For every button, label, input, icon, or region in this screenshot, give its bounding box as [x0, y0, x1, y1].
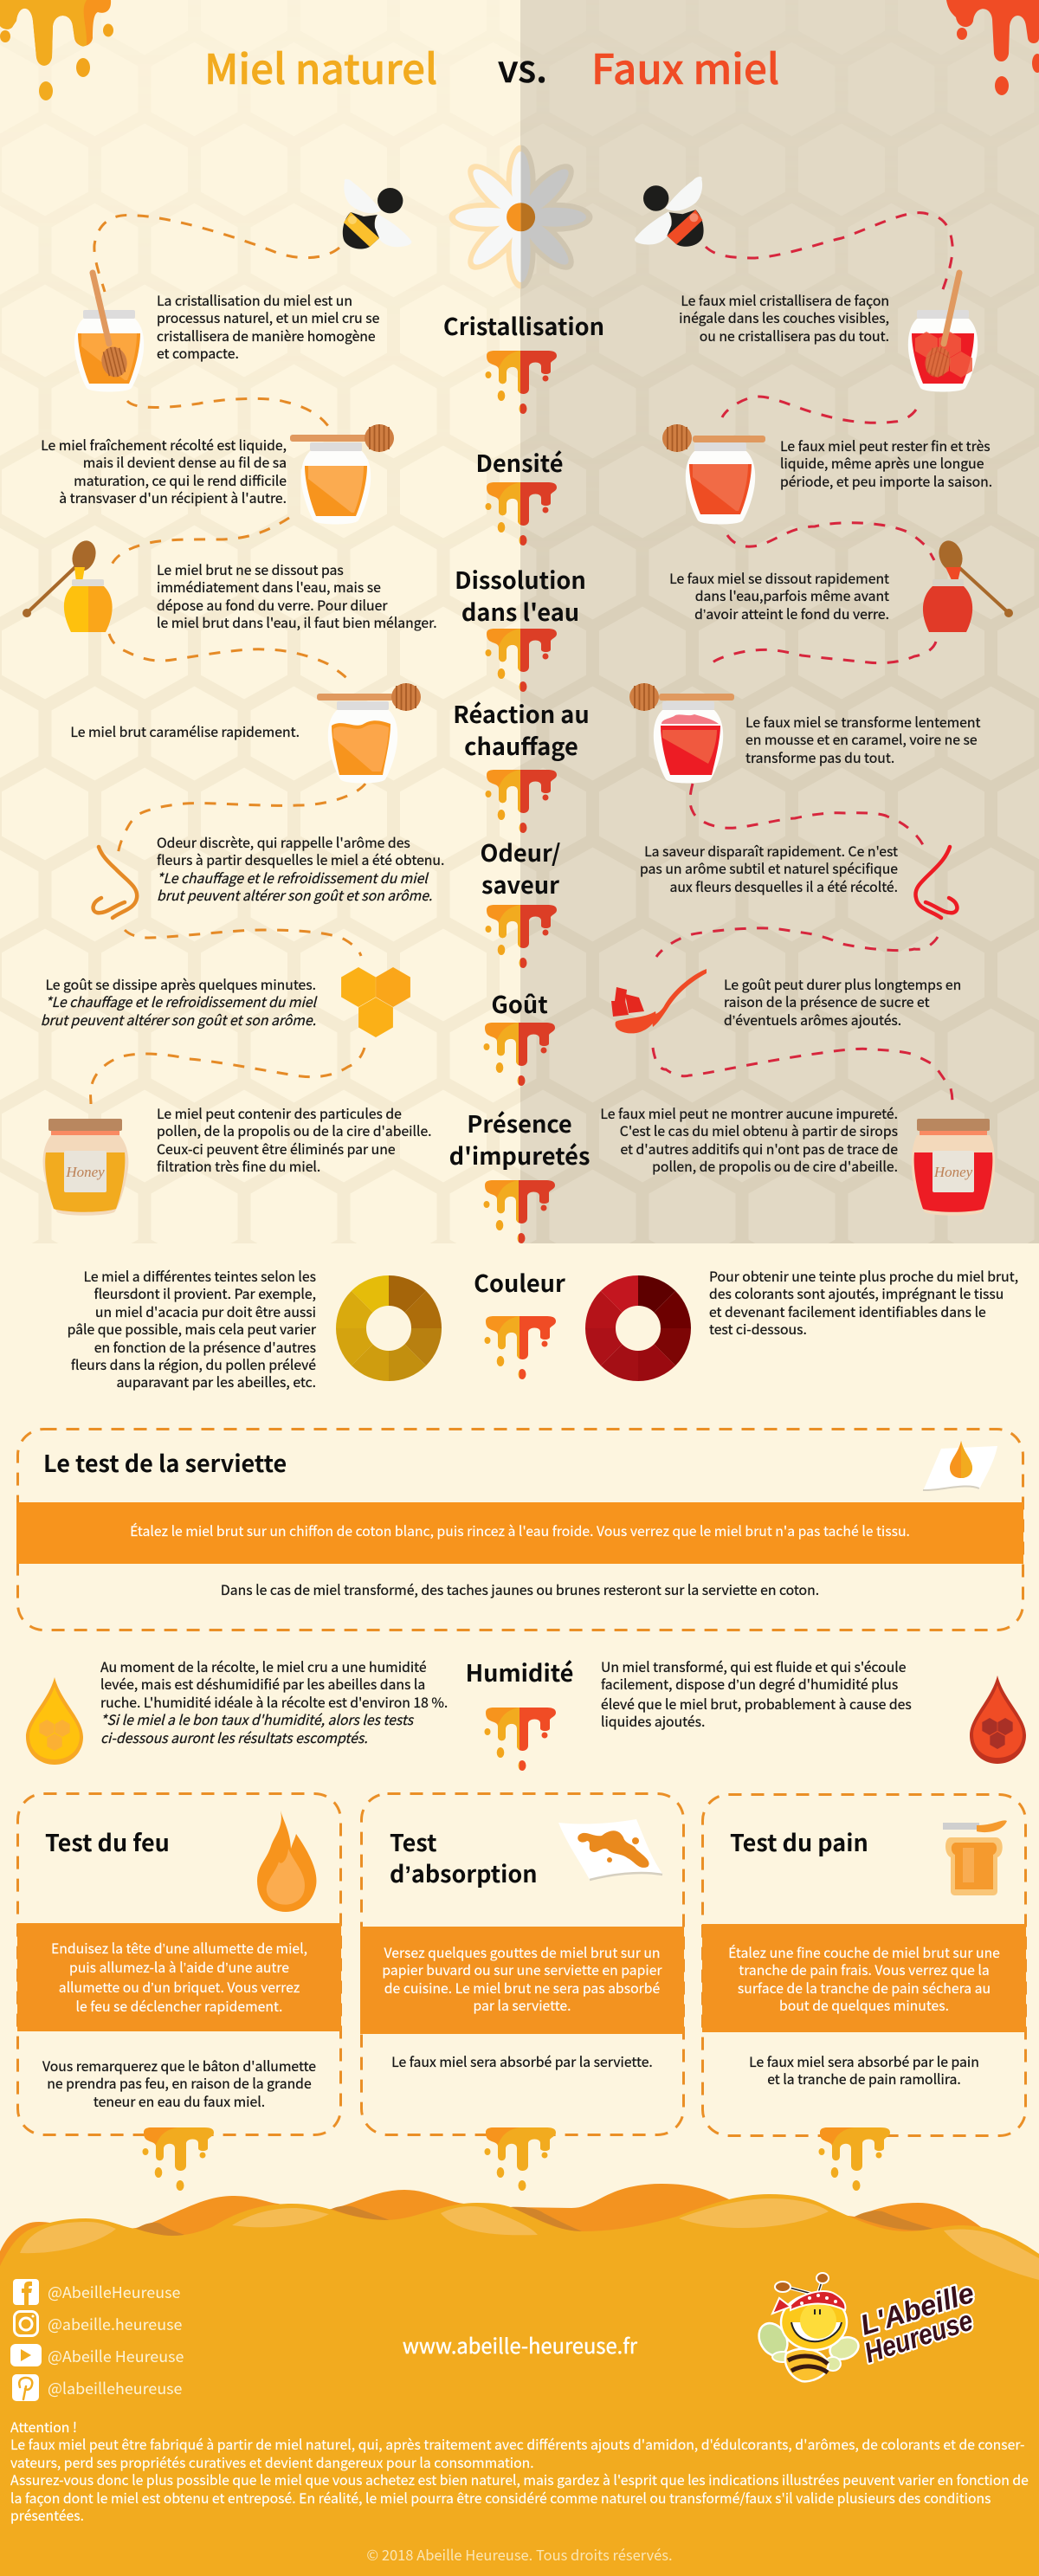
text: smell natural: brut peuvent altérer son goût et son arôme. [157, 885, 432, 905]
text: dissolution false: dans l'eau,parfois même avant [695, 585, 889, 605]
text: absorption test instructions [382, 1942, 662, 2015]
heading: Test d'absorption: Test [390, 1824, 436, 1858]
icon: jar density natural honey [290, 424, 394, 525]
icon: jar heating natural honey [317, 683, 421, 783]
title: vs.: vs. [498, 40, 547, 94]
text: fire test result: teneur en eau du faux miel. [94, 2091, 265, 2111]
text: pinterest handle: @labeilleheureuse [48, 2377, 182, 2399]
icon: drip separators on cream [485, 1316, 556, 1771]
icon: nose false honey [915, 847, 957, 918]
text: impurities false: Le faux miel peut ne montrer aucune impureté. [600, 1103, 898, 1123]
chart: false honey colour ring [585, 1275, 691, 1381]
icon: wave highlights [20, 2198, 1039, 2280]
heading: Test du feu: Test du feu [45, 1824, 170, 1858]
panel: fire test frame [17, 1794, 341, 2135]
background: honeycomb pattern [0, 282, 1039, 1243]
logo: L'Abeille Heureuse: L'Abeille [856, 2276, 978, 2341]
icon: wave front layer [0, 2194, 1039, 2576]
text: colour natural: Le miel a différentes teintes selon les [83, 1266, 316, 1286]
text: dissolution false [669, 568, 889, 623]
text: crystallisation natural: et compacte. [157, 343, 239, 363]
heading: Dissolution dans l'eau: dans l'eau [461, 593, 579, 628]
icon: honey waves back layer [0, 2184, 1039, 2338]
icon: honey jar with label natural: Honey [65, 1164, 105, 1180]
text: humidity natural: Au moment de la récolte, le miel cru a une humidité [100, 1656, 427, 1676]
text: warning note: vateurs, perd ses propriétés curatives et devient dangereux pour la consommation. [10, 2452, 534, 2472]
text: colour natural: en fonction de la présence d'autres [94, 1337, 316, 1357]
text: heating false: Le faux miel se transforme lentement [745, 712, 980, 732]
text: taste natural [41, 974, 318, 1030]
text: crystallisation false [679, 290, 889, 345]
text: humidity false: Un miel transformé, qui est fluide et qui s'écoule [601, 1656, 906, 1676]
text: smell natural: Odeur discrète, qui rappelle l'arôme des [157, 832, 410, 852]
background: false honey side [520, 0, 1039, 1243]
text: absorption test instructions: de cuisine. Le miel brut ne sera pas absorbé [384, 1978, 660, 1998]
text: smell natural: fleurs à partir desquelles le miel a été obtenu. [157, 849, 444, 869]
text: fire test result: Vous remarquerez que le bâton d'allumette [42, 2056, 316, 2076]
text: colour false: Pour obtenir une teinte plus proche du miel brut, [709, 1266, 1018, 1286]
text: fire test instructions: allumette ou d’un briquet. Vous verrez [59, 1977, 300, 1997]
title: Faux miel: Faux miel [591, 36, 779, 96]
icon: facebook [13, 2279, 39, 2305]
text: taste natural: *Le chauffage et le refroidissement du miel [45, 991, 316, 1011]
heading: Odeur/saveur [480, 834, 561, 901]
icon: drips under test cards [142, 2127, 890, 2191]
text: density natural: maturation, ce qui le rend difficile [74, 470, 287, 490]
icon: youtube [10, 2344, 42, 2366]
heading: Cristallisation: Cristallisation [443, 307, 604, 342]
text: humidity false: liquides ajoutés. [601, 1711, 705, 1731]
icon: natural honey drop [26, 1677, 83, 1765]
text: density false: période, et peu importe la saison. [780, 471, 992, 491]
heading: Le test de la serviette: Le test de la serviette [43, 1445, 287, 1479]
text: colour natural [68, 1266, 317, 1391]
text: smell false: pas un arôme subtil et naturel spécifique [640, 858, 898, 878]
heading: Test d'absorption [390, 1824, 538, 1889]
text: taste natural: Le goût se dissipe après quelques minutes. [45, 974, 316, 994]
heading: Dissolution dans l'eau [455, 561, 586, 628]
arrows: false honey dashed path [653, 213, 952, 1104]
text: taste false: Le goût peut durer plus longtemps en [724, 974, 961, 994]
text: absorption test instructions: papier buvard ou sur une serviette en papier [382, 1959, 662, 1979]
text: impurities false: et d'autres additifs qui n'ont pas de trace de [620, 1139, 898, 1159]
text: impurities false: C'est le cas du miel obtenu à partir de sirops [620, 1120, 898, 1140]
text: taste false: d’éventuels arômes ajoutés. [724, 1010, 901, 1030]
text: density natural: à transvaser d'un récipient à l'autre. [59, 487, 287, 507]
text: impurities natural: Ceux-ci peuvent être éliminés par une [157, 1139, 396, 1159]
panel: bread test frame [702, 1794, 1026, 2135]
text: bread test instructions: bout de quelques minutes. [779, 1995, 949, 2015]
text: crystallisation natural: processus naturel, et un miel cru se [157, 307, 379, 327]
text: dissolution natural: le miel brut dans l'eau, il faut bien mélanger. [157, 612, 437, 632]
icon: honey jar with label false [912, 1119, 995, 1216]
icon: pinterest [12, 2374, 39, 2401]
icon: honey jar with label natural [43, 1119, 128, 1216]
text: towel test result: Dans le cas de miel transformé, des taches jaunes ou brunes resteront sur la serviette en coton. [221, 1579, 819, 1599]
logo: L'Abeille Heureuse: Heureuse [861, 2304, 977, 2369]
heading: Goût: Goût [491, 985, 548, 1020]
text: humidity natural [100, 1656, 448, 1747]
text: smell false [640, 841, 898, 896]
text: density natural: mais il devient dense au fil de sa [83, 452, 287, 472]
text: warning note: Assurez-vous donc le plus possible que le miel que vous achetez est bien naturel, mais gardez à l'esprit que les indications illustrées peuvent varier en fonction de [10, 2469, 1029, 2489]
text: smell false: aux fleurs desquelles il a été récolté. [670, 876, 898, 896]
text: crystallisation natural: cristallisera de manière homogène [157, 326, 376, 345]
text: warning note: présentées. [10, 2505, 84, 2525]
icon: spoon and jar natural honey [23, 538, 113, 632]
heading: Odeur/saveur: Odeur/ [480, 834, 561, 868]
text: colour false [709, 1266, 1018, 1339]
icon: honeycomb [341, 967, 410, 1037]
text: impurities natural: filtration très fine du miel. [157, 1156, 320, 1176]
text: absorption test instructions: par la serviette. [473, 1995, 571, 2015]
heading: Présence d'impuretés: d'impuretés [449, 1137, 590, 1172]
text: heating natural: Le miel brut caramélise rapidement. [70, 721, 300, 741]
text: taste false [724, 974, 961, 1030]
text: humidity false [601, 1656, 912, 1731]
icon: towel with drop [923, 1441, 997, 1491]
chart: natural honey colour ring [336, 1275, 442, 1381]
text: heating false [745, 712, 980, 767]
icon: spoon and jar false honey [923, 538, 1013, 632]
panel: towel test frame [16, 1429, 1023, 1630]
icon: drip separators in comparison rows [483, 351, 557, 1243]
text: colour natural: un miel d'acacia pur doit être aussi [95, 1301, 316, 1321]
text: dissolution natural: immédiatement dans l'eau, mais se [157, 577, 381, 597]
text: impurities natural: Le miel peut contenir des particules de [157, 1103, 402, 1123]
heading: Couleur: Couleur [474, 1264, 565, 1299]
text: taste natural: brut peuvent altérer son goût et son arôme. [41, 1010, 316, 1030]
text: fire test result [42, 2056, 316, 2111]
text: colour natural: pâle que possible, mais cela peut varier [68, 1319, 316, 1339]
arrows: natural honey dashed path [91, 215, 365, 1104]
icon: nose natural honey [94, 847, 137, 918]
icon: top right red drip [946, 0, 1039, 95]
text: bread test instructions: surface de la tranche de pain séchera au [738, 1978, 991, 1998]
icon: false honey drop [970, 1675, 1026, 1764]
text: impurities false [600, 1103, 898, 1176]
text: warning note [10, 2417, 1029, 2525]
text: humidity natural: *Si le miel a le bon taux d'humidité, alors les tests [100, 1709, 413, 1729]
icon: top left honey drip [0, 0, 113, 100]
icon: central flower [449, 145, 592, 289]
text: crystallisation natural: La cristallisation du miel est un [157, 290, 352, 310]
text: impurities natural [157, 1103, 432, 1176]
text: colour natural: auparavant par les abeilles, etc. [116, 1372, 316, 1391]
text: heating false: en mousse et en caramel, voire ne se [745, 729, 978, 749]
text: humidity false: élevé que le miel brut, probablement à cause des [601, 1694, 912, 1714]
text: crystallisation natural [157, 290, 379, 363]
heading: Présence d'impuretés [449, 1105, 590, 1172]
text: humidity false: facilement, dispose d’un degré d'humidité plus [601, 1674, 898, 1694]
icon: blotting paper with stain [558, 1819, 662, 1880]
text: bread test result: Le faux miel sera absorbé par le pain [749, 2051, 979, 2071]
text: copyright: © 2018 Abeille Heureuse. Tous droits réservés. [366, 2544, 673, 2565]
text: bread test instructions: Étalez une fine couche de miel brut sur une [728, 1942, 1000, 1962]
title: Miel naturel: Miel naturel [204, 36, 437, 96]
text: smell natural: *Le chauffage et le refroidissement du miel [157, 868, 428, 888]
icon: natural honey bee [343, 179, 411, 249]
icon: wave shadows [136, 2206, 933, 2237]
heading: Réaction au chauffage [453, 695, 590, 762]
heading: Réaction au chauffage: chauffage [464, 727, 578, 762]
icon: jar crystallised natural honey [74, 273, 144, 391]
text: density false: Le faux miel peut rester fin et très [780, 436, 991, 455]
text: crystallisation false: Le faux miel cristallisera de façon [681, 290, 889, 310]
icon: instagram [14, 2312, 38, 2336]
text: bread test result [749, 2051, 979, 2089]
heading: Dissolution dans l'eau: Dissolution [455, 561, 586, 596]
text: smell natural [157, 832, 444, 905]
heading: Test d'absorption: d’absorption [390, 1856, 538, 1889]
heading: Odeur/saveur: saveur [481, 866, 559, 901]
text: youtube handle: @Abeille Heureuse [48, 2345, 184, 2367]
text: colour natural: fleurs dans la région, du pollen prélevé [71, 1354, 316, 1374]
text: bread test instructions: tranche de pain frais. Vous verrez que la [739, 1959, 990, 1979]
heading: Humidité: Humidité [466, 1654, 573, 1688]
text: dissolution natural [157, 559, 437, 632]
text: impurities natural: pollen, de la propolis ou de la cire d'abeille. [157, 1120, 432, 1140]
heading: Présence d'impuretés: Présence [467, 1105, 572, 1140]
icon: jar heating false honey [629, 683, 734, 783]
text: impurities false: pollen, de propolis ou de cire d'abeille. [652, 1156, 898, 1176]
text: fire test instructions: puis allumez-la à l’aide d’une autre [69, 1957, 289, 1977]
text: heating false: transforme pas du tout. [745, 747, 894, 767]
text: humidity natural: ruche. L'humidité idéale à la récolte est d'environ 18 %. [100, 1692, 448, 1712]
text: fire test instructions [51, 1938, 307, 2016]
text: website: www.abeille-heureuse.fr [403, 2330, 637, 2360]
heading: Réaction au chauffage: Réaction au [453, 695, 590, 730]
text: density false: liquide, même après une longue [780, 453, 984, 473]
text: fire test result: ne prendra pas feu, en raison de la grande [47, 2073, 312, 2093]
text: absorption test instructions: Versez quelques gouttes de miel brut sur un [384, 1942, 661, 1962]
text: towel test instructions: Étalez le miel brut sur un chiffon de coton blanc, puis rincez à l'eau froide. Vous verrez que le miel brut n'a pas taché le tissu. [130, 1520, 910, 1540]
text: bread test result: et la tranche de pain ramollira. [767, 2069, 961, 2089]
heading: Densité: Densité [475, 444, 564, 479]
text: colour false: des colorants sont ajoutés, imprégnant le tissu [709, 1283, 1004, 1303]
icon: spoon with sugar [611, 969, 707, 1033]
text: warning note: Le faux miel peut être fabriqué à partir de miel naturel, qui, après traitement avec différents ajouts d'amidon, d'édulcorants, d'arômes, de colorants et de conser- [10, 2434, 1025, 2454]
text: dissolution false: d’avoir atteint le fond du verre. [694, 604, 889, 623]
text: colour false: et devenant facilement identifiables dans le [709, 1301, 986, 1321]
text: fire test instructions: Enduisez la tête d’une allumette de miel, [51, 1938, 307, 1958]
text: bread test instructions [728, 1942, 1000, 2015]
text: colour natural: fleursdont il provient. Par exemple, [94, 1283, 316, 1303]
text: humidity natural: levée, mais est déshumidifié par les abeilles dans la [100, 1674, 425, 1694]
icon: false honey bee [635, 177, 704, 247]
text: crystallisation false: inégale dans les couches visibles, [679, 307, 889, 327]
text: smell false: La saveur disparaît rapidement. Ce n'est [644, 841, 898, 861]
text: dissolution natural: dépose au fond du verre. Pour diluer [157, 595, 387, 615]
heading: Test du pain: Test du pain [730, 1824, 868, 1858]
text: fire test instructions: le feu se déclencher rapidement. [76, 1996, 282, 2016]
text: facebook handle: @AbeilleHeureuse [48, 2281, 180, 2303]
icon: flame [257, 1811, 316, 1912]
text: taste false: raison de la présence de sucre et [724, 991, 930, 1011]
text: density false [780, 436, 992, 491]
icon: toast and knife [943, 1820, 1007, 1895]
icon: jar density false honey [662, 424, 765, 525]
text: instagram handle: @abeille.heureuse [48, 2313, 182, 2335]
icon: honey jar with label false: Honey [933, 1164, 973, 1180]
text: colour false: test ci-dessous. [709, 1319, 807, 1339]
text: absorption test result: Le faux miel sera absorbé par la serviette. [391, 2051, 653, 2071]
text: density natural [41, 435, 287, 507]
text: crystallisation false: ou ne cristallisera pas du tout. [700, 326, 889, 345]
text: dissolution false: Le faux miel se dissout rapidement [669, 568, 889, 588]
logo: L'Abeille Heureuse [753, 2273, 978, 2381]
panel: absorption test frame [360, 1794, 684, 2135]
text: dissolution natural: Le miel brut ne se dissout pas [157, 559, 344, 579]
text: warning note: la façon dont le miel est obtenu et entreposé. En réalité, le miel pourra être considéré comme naturel ou transformé/faux s'il valide plusieurs des conditions [10, 2488, 991, 2508]
text: density natural: Le miel fraîchement récolté est liquide, [41, 435, 287, 455]
text: warning note: Attention ! [10, 2417, 77, 2437]
icon: jar crystallised false honey [908, 273, 978, 391]
text: humidity natural: ci-dessous auront les résultats escomptés. [100, 1727, 368, 1747]
